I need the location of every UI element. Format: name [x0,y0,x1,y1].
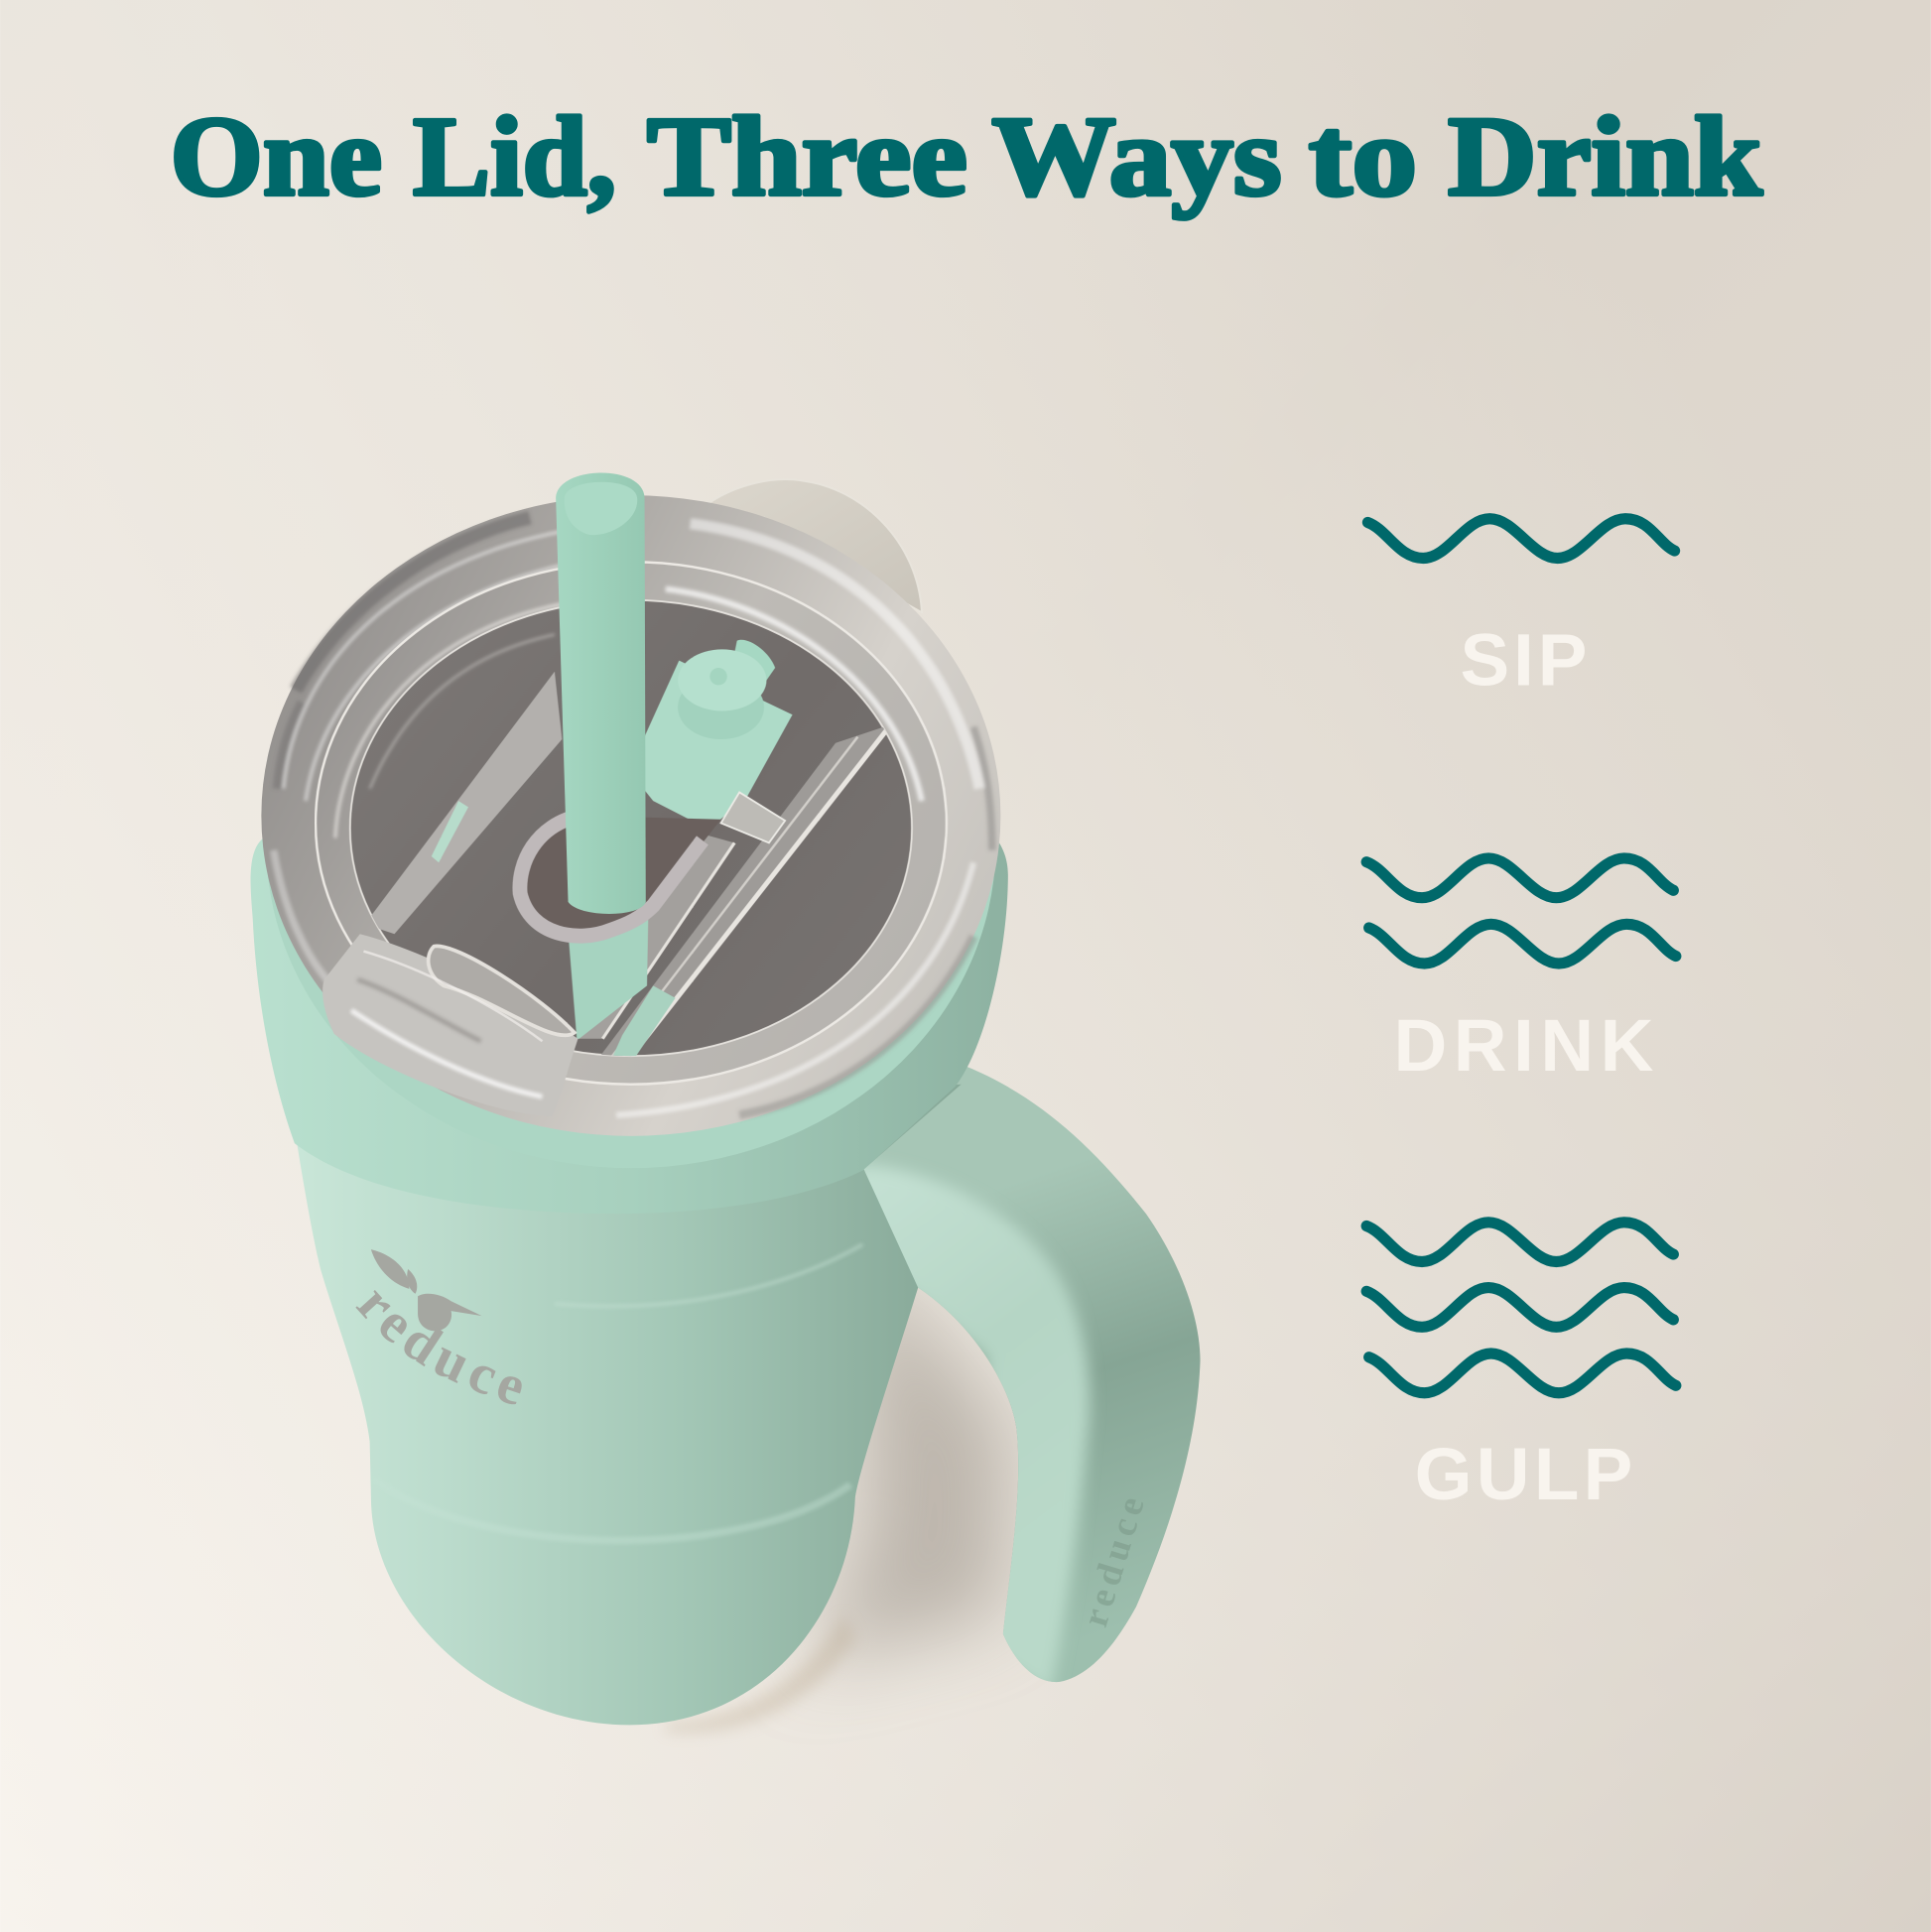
plug [643,640,793,830]
logo leaves and bird [371,1249,482,1331]
logo wordmark: reduce [355,1290,522,1405]
title [170,93,1762,219]
handle brand text: reduce [1075,1492,1153,1631]
wall highlights [335,589,922,837]
lower body band [373,1479,850,1540]
lid tab [700,479,922,612]
lid well [350,600,912,1056]
lid outer ring [261,495,1000,1136]
lid [261,472,1000,1136]
one wave icon [1367,519,1675,558]
two waves icon [1366,858,1676,964]
title: Three [647,93,967,219]
collar inner groove [266,522,995,1168]
title: Drink [1448,93,1762,219]
slider channels [365,672,891,1071]
tumbler body [295,1085,962,1725]
mouthpiece [322,934,578,1116]
handle [863,1067,1201,1683]
title: One [170,93,382,219]
collar [251,837,1008,1214]
brand logo [355,1249,522,1405]
lid inner wall [316,562,947,1085]
straw [556,472,646,914]
tumbler shadow [666,1244,1010,1733]
three waves icon [1366,1223,1676,1393]
slider clip [721,792,785,842]
gulp indicator [1366,1223,1676,1515]
straw hole [520,816,721,936]
title: Lid, [413,93,616,219]
drink indicator [1366,858,1676,1087]
title: to [1309,93,1417,219]
SIP label: SIP [1461,618,1587,701]
ring highlights [274,518,992,1115]
title: Ways [992,93,1281,219]
mint reflection [567,918,648,1039]
GULP label: GULP [1415,1433,1632,1515]
DRINK label: DRINK [1393,1004,1654,1087]
sip indicator [1367,519,1675,701]
illustration: tumbler [250,472,1201,1725]
faint body band line [555,1244,862,1306]
